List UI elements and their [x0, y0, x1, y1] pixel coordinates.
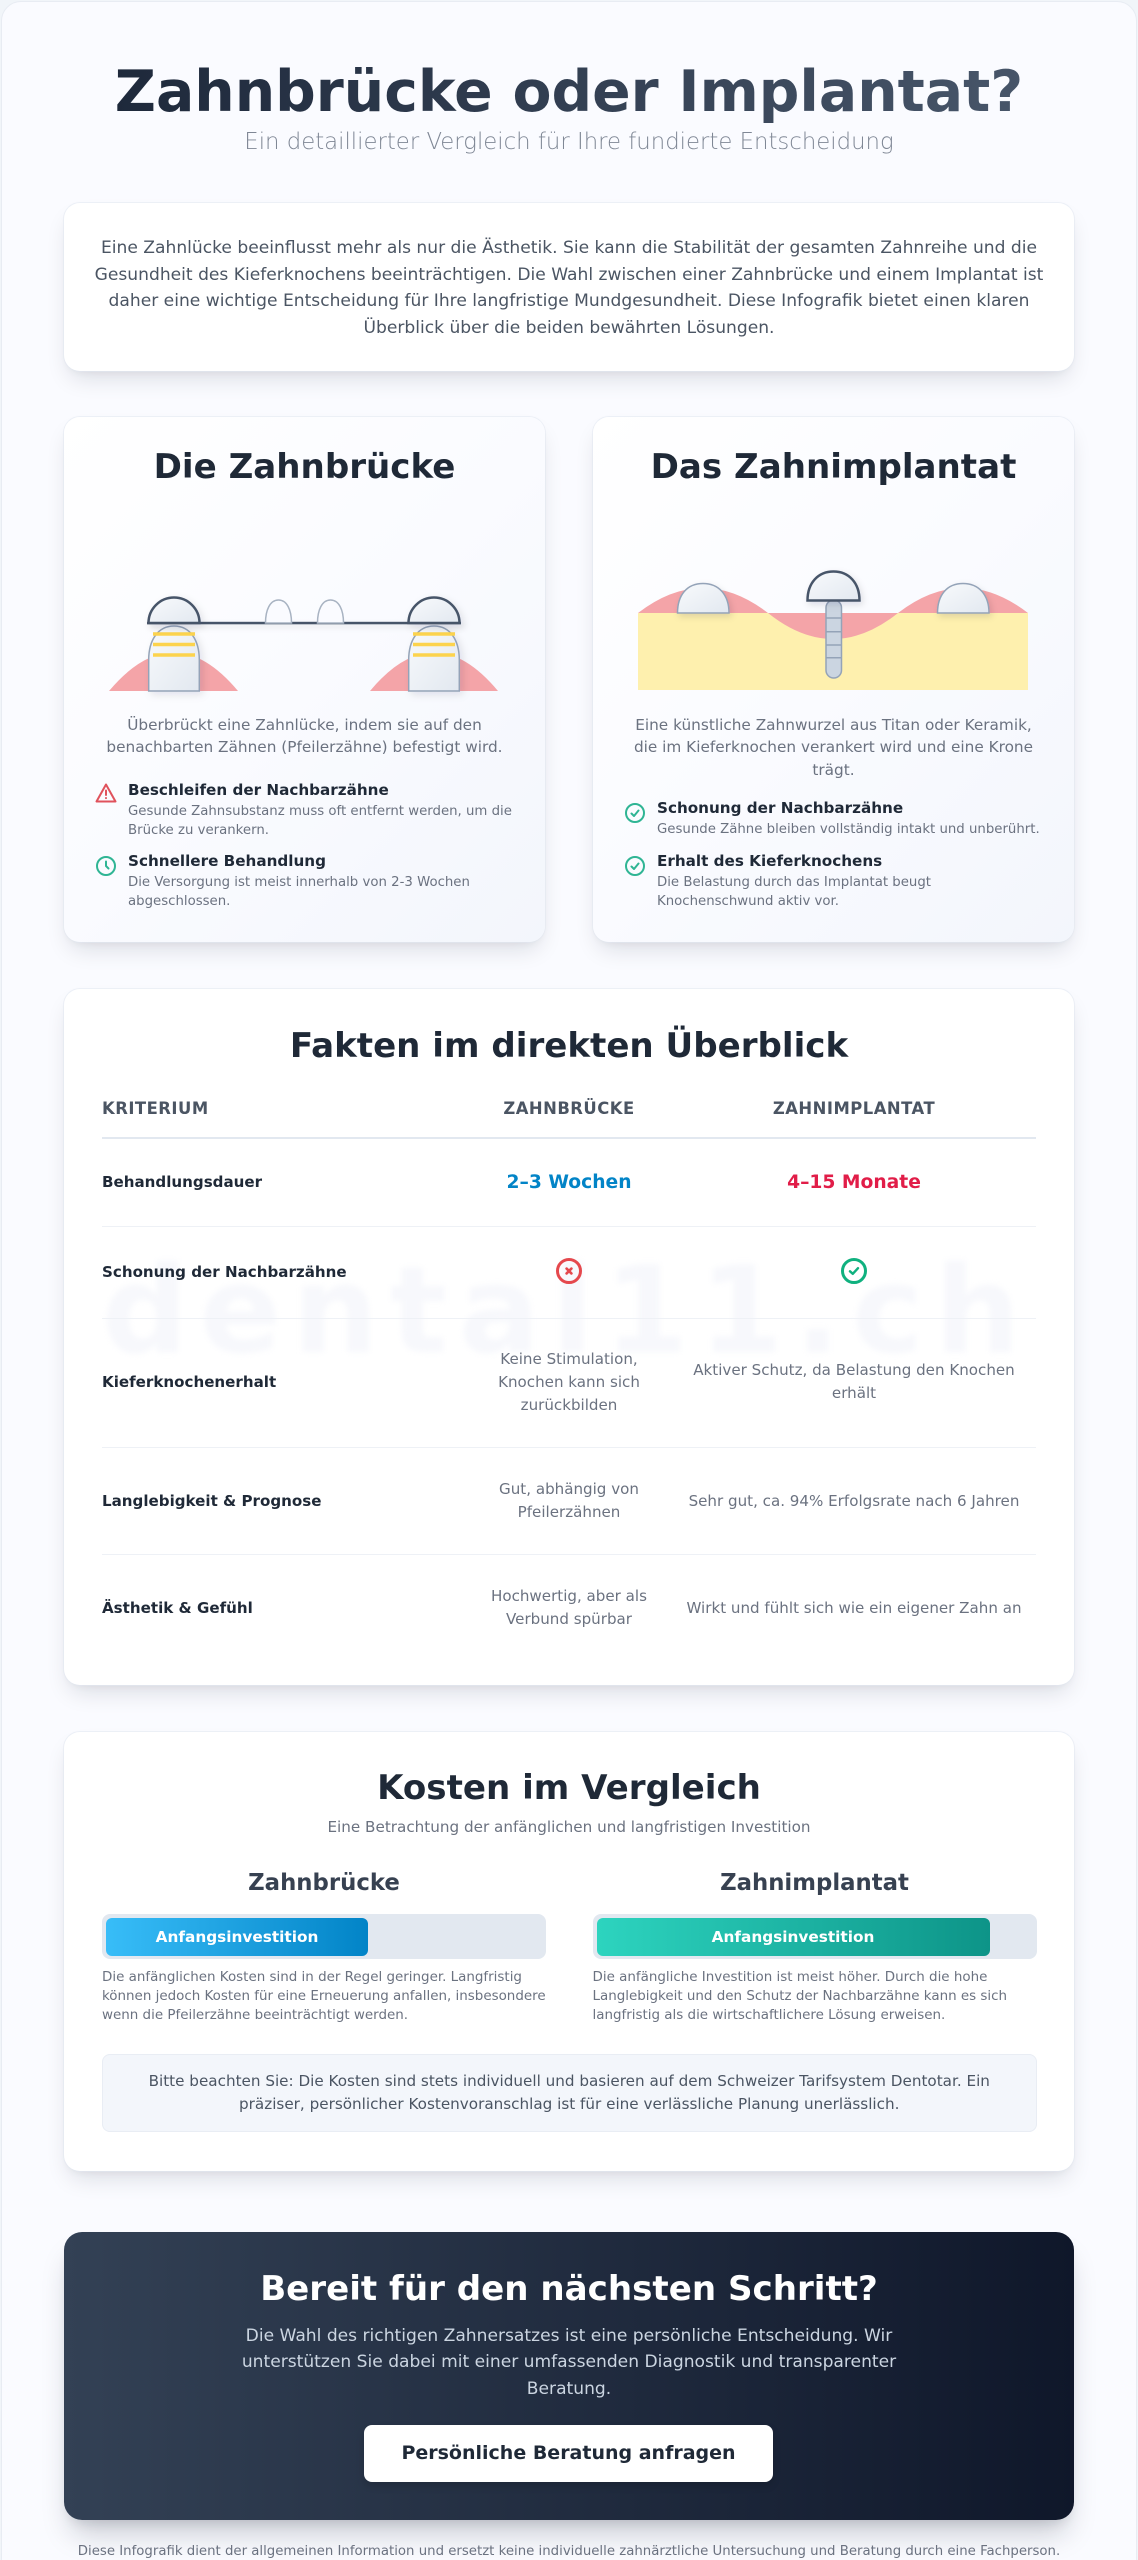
title: Zahnbrücke oder Implantat?: [115, 59, 1023, 125]
panel: intro: Überblick über die beiden bewährten Lösungen.: [363, 318, 774, 338]
description: [106, 716, 503, 756]
table header: [102, 1098, 935, 1118]
row: Kieferknochenerhalt: Kieferknochenerhalt: [102, 1373, 276, 1391]
row: Langlebigkeit: Langlebigkeit & Prognose: [102, 1492, 322, 1510]
cost bar: Zahnbrücke: [102, 1914, 546, 1959]
text: Zahnbrücke costs: können jedoch Kosten für eine Erneuerung anfallen, insbesondere: [102, 1988, 546, 2004]
panel: facts table: [64, 989, 1074, 1685]
heading: Kosten: Kosten im Vergleich: [377, 1768, 761, 1808]
list item: Beschleifen: Gesunde Zahnsubstanz muss oft entfernt werden, um die: [128, 804, 512, 818]
note box: präziser, persönlicher Kostenvoranschlag ist für eine verlässliche Planung unerlässlich.: [239, 2095, 899, 2113]
watermark: dental11.ch: [102, 1242, 1032, 1380]
description: trägt.: [812, 761, 855, 779]
row: Behandlungsdauer: 4–15 Monate: [787, 1172, 921, 1192]
panel: intro: daher eine wichtige Entscheidung für Ihre langfristige Mundgesundheit. Diese Infografik bietet einen klaren: [109, 291, 1029, 311]
heading: Fakten: Fakten im direkten Überblick: [290, 1026, 848, 1066]
row: Ästhetik: Wirkt und fühlt sich wie ein eigener Zahn an: [686, 1598, 1022, 1616]
text: CTA: Die Wahl des richtigen Zahnersatzes ist eine persönliche Entscheidung. Wir: [246, 2326, 892, 2346]
list item: Schnellere Behandlung: Die Versorgung ist meist innerhalb von 2-3 Wochen: [128, 875, 470, 890]
icon: check: [625, 856, 645, 876]
row: Langlebigkeit: Gut, abhängig von: [499, 1480, 639, 1498]
description: [634, 716, 1033, 779]
row: Kieferknochenerhalt: Keine Stimulation,: [500, 1350, 638, 1368]
heading: Das Zahnimplantat: Das Zahnimplantat: [651, 447, 1016, 487]
description: Eine künstliche Zahnwurzel aus Titan oder Keramik,: [635, 716, 1032, 734]
row: Behandlungsdauer: [102, 1172, 921, 1192]
column heading: Zahnbrücke: Zahnbrücke: [248, 1870, 400, 1896]
icon: warning: [96, 784, 116, 802]
note box: [102, 2054, 1036, 2132]
subheading: Eine Betrachtung der anfänglichen und langfristigen Investition: [327, 1818, 811, 1836]
list item: Schnellere Behandlung: abgeschlossen.: [128, 894, 230, 909]
icon: check: [841, 1258, 867, 1284]
text: CTA: Beratung.: [527, 2379, 611, 2399]
panel: call to action: [64, 2232, 1074, 2520]
footer disclaimer: Diese Infografik dient der allgemeinen Information und ersetzt keine individuelle zahnärztliche Untersuchung und Beratung durch eine Fachperson.: [78, 2544, 1060, 2559]
button: Persönliche Beratung anfragen: [401, 2442, 736, 2464]
text: CTA: unterstützen Sie dabei mit einer umfassenden Diagnostik und transparenter: [242, 2352, 896, 2372]
panel: costs: [64, 1732, 1074, 2171]
heading: CTA: Bereit für den nächsten Schritt?: [260, 2269, 878, 2309]
row: Kieferknochenerhalt: erhält: [832, 1384, 876, 1402]
text: Zahnbrücke costs: Die anfänglichen Kosten sind in der Regel geringer. Langfristig: [102, 1970, 522, 1984]
table header: ZAHNBRÜCKE: [503, 1099, 635, 1118]
note box: Bitte beachten Sie: Die Kosten sind stets individuell und basieren auf dem Schweizer Tarifsystem Dentotar. Ein: [149, 2072, 990, 2090]
button: [364, 2425, 773, 2482]
row: Kieferknochenerhalt: Aktiver Schutz, da Belastung den Knochen: [693, 1361, 1015, 1379]
row: Langlebigkeit: Pfeilerzähnen: [518, 1503, 620, 1521]
table header: ZAHNIMPLANTAT: [773, 1099, 935, 1118]
cost bar: Zahnimplantat: Anfangsinvestition: [712, 1928, 874, 1946]
heading: Die Zahnbrücke: Die Zahnbrücke: [154, 447, 455, 487]
description: benachbarten Zähnen (Pfeilerzähne) befestigt wird.: [106, 738, 503, 756]
text: Zahnbrücke costs: wenn die Pfeilerzähne beeinträchtigt werden.: [102, 2008, 408, 2022]
text: Zahnbrücke costs: [102, 1970, 546, 2022]
text: Zahnimplantat costs: Langlebigkeit und den Schutz der Nachbarzähne kann es sich: [592, 1988, 1007, 2004]
row: Ästhetik: Hochwertig, aber als: [491, 1587, 647, 1605]
list item: Schonung: Gesunde Zähne bleiben vollständig intakt und unberührt.: [657, 822, 1040, 837]
panel: Zahnimplantat: [593, 417, 1074, 942]
table header: KRITERIUM: [102, 1099, 209, 1118]
text: Zahnimplantat costs: Die anfängliche Investition ist meist höher. Durch die hohe: [592, 1970, 987, 1984]
panel: Zahnbrücke: [64, 417, 545, 942]
text: Zahnimplantat costs: [592, 1970, 1007, 2022]
illustration: implant: [638, 570, 1028, 690]
description: die im Kieferknochen verankert wird und eine Krone: [634, 738, 1033, 756]
list item: Schnellere Behandlung: [128, 852, 470, 909]
text: CTA: [242, 2326, 896, 2399]
icon: check: [625, 803, 645, 823]
list item: Schonung: [657, 799, 1040, 837]
subtitle: Ein detaillierter Vergleich für Ihre fundierte Entscheidung: [244, 129, 894, 155]
row: Behandlungsdauer: 2–3 Wochen: [506, 1172, 632, 1192]
panel: intro: Gesundheit des Kieferknochens beeinträchtigen. Die Wahl zwischen einer Zahnbrücke und einem Implantat ist: [95, 265, 1043, 285]
list item: Schnellere Behandlung: Schnellere Behandlung: [128, 852, 326, 870]
column heading: Zahnimplantat: Zahnimplantat: [720, 1870, 909, 1896]
row: Kieferknochenerhalt: zurückbilden: [521, 1396, 617, 1414]
row: Schonung der Nachbarzähne: Schonung der Nachbarzähne: [102, 1262, 347, 1280]
row: Ästhetik: Ästhetik & Gefühl: [102, 1599, 253, 1617]
row: Langlebigkeit: Sehr gut, ca. 94% Erfolgsrate nach 6 Jahren: [689, 1492, 1019, 1510]
cost bar: Zahnbrücke: Anfangsinvestition: [156, 1928, 318, 1946]
icon: clock: [96, 856, 116, 876]
list item: Beschleifen: Brücke zu verankern.: [128, 822, 269, 838]
row: Langlebigkeit: [102, 1480, 1019, 1521]
description: Überbrückt eine Zahnlücke, indem sie auf den: [127, 716, 482, 734]
list item: Erhalt: Die Belastung durch das Implantat beugt: [657, 875, 931, 890]
row: Kieferknochenerhalt: [102, 1350, 1015, 1414]
row: Behandlungsdauer: Behandlungsdauer: [102, 1172, 262, 1190]
illustration: bridge: [109, 596, 498, 696]
row: Kieferknochenerhalt: Knochen kann sich: [498, 1372, 640, 1390]
list item: Beschleifen: [128, 780, 512, 838]
list item: Beschleifen: Beschleifen der Nachbarzähne: [128, 780, 389, 798]
row: Ästhetik: [102, 1587, 1022, 1628]
list item: Erhalt: Erhalt des Kieferknochens: [657, 852, 882, 870]
list item: Erhalt: [657, 852, 931, 909]
panel: intro: Eine Zahnlücke beeinflusst mehr als nur die Ästhetik. Sie kann die Stabilität der gesamten Zahnreihe und die: [101, 238, 1037, 258]
text: Zahnimplantat costs: langfristig als die wirtschaftlichere Lösung erweisen.: [592, 2008, 945, 2022]
list item: Erhalt: Knochenschwund aktiv vor.: [657, 894, 839, 909]
icon: cross: [556, 1258, 582, 1284]
cost bar: Zahnimplantat: [592, 1914, 1036, 1959]
list item: Schonung: Schonung der Nachbarzähne: [657, 799, 903, 817]
row: Schonung der Nachbarzähne: [102, 1258, 867, 1284]
panel: intro: [64, 203, 1074, 371]
row: Ästhetik: Verbund spürbar: [506, 1610, 632, 1628]
